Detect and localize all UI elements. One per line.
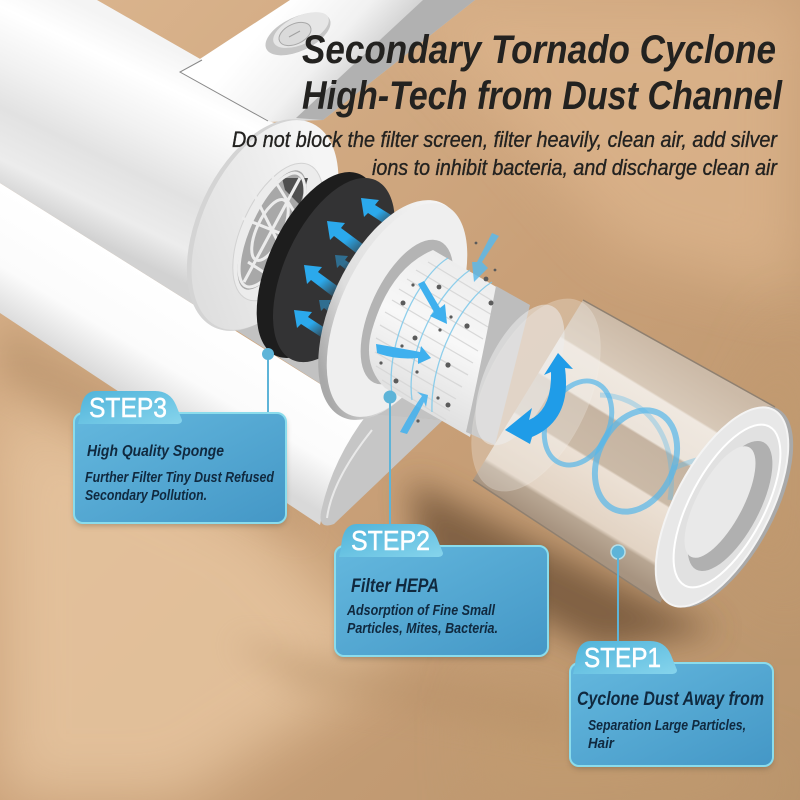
tab (78, 391, 182, 424)
callout connector: step 2 (384, 390, 396, 525)
panel: step 2: STEP2 (351, 525, 430, 556)
sponge filter (231, 154, 420, 380)
panel: step 2: Particles, Mites, Bacteria. (347, 620, 498, 637)
motor end ring (156, 96, 369, 354)
panel: step 1: Separation Large Particles, (588, 717, 746, 734)
cyclone arrow (505, 353, 573, 444)
panel: step 2: Filter HEPA (351, 576, 439, 597)
icon: filter grille (224, 161, 320, 299)
callout connector: step 3 (262, 348, 274, 412)
dust cup (471, 298, 794, 608)
shadow under tube (190, 270, 443, 420)
panel: step 2 (335, 524, 548, 659)
panel: step 1: Hair (588, 735, 615, 752)
panel: step 3: High Quality Sponge (87, 443, 224, 460)
tab (339, 524, 443, 557)
HEPA filter (288, 178, 530, 445)
vacuum body (0, 0, 475, 526)
tab (573, 641, 677, 674)
arrows: airflow into HEPA (376, 233, 499, 434)
pleated cylinder (369, 250, 505, 437)
callout connector: step 1 (611, 545, 625, 643)
panel: step 3: STEP3 (89, 392, 167, 423)
handle seam (180, 60, 268, 121)
main tube (0, 0, 300, 318)
gray end band (466, 286, 530, 445)
airflow arcs (391, 258, 492, 412)
cyclone helix (542, 378, 696, 515)
panel: step 3: Secondary Pollution. (85, 487, 207, 504)
dust particles (379, 242, 496, 423)
cup mouth rings (629, 386, 800, 628)
panel: step 1: STEP1 (584, 642, 661, 673)
panel: step 3: Further Filter Tiny Dust Refused (85, 469, 275, 486)
HEPA flange ring (288, 178, 496, 442)
lower body end face (321, 413, 443, 526)
panel: step 2: Adsorption of Fine Small (346, 602, 496, 619)
panel: step 1 (570, 641, 773, 769)
icon: power button (259, 4, 337, 64)
subtitle (232, 127, 778, 180)
handle (180, 0, 475, 122)
panel: step 3 (74, 391, 286, 526)
panel: step 1: Cyclone Dust Away from (577, 689, 764, 710)
arrows: airflow through sponge (294, 198, 396, 337)
lower body (0, 183, 368, 525)
title (302, 28, 783, 118)
